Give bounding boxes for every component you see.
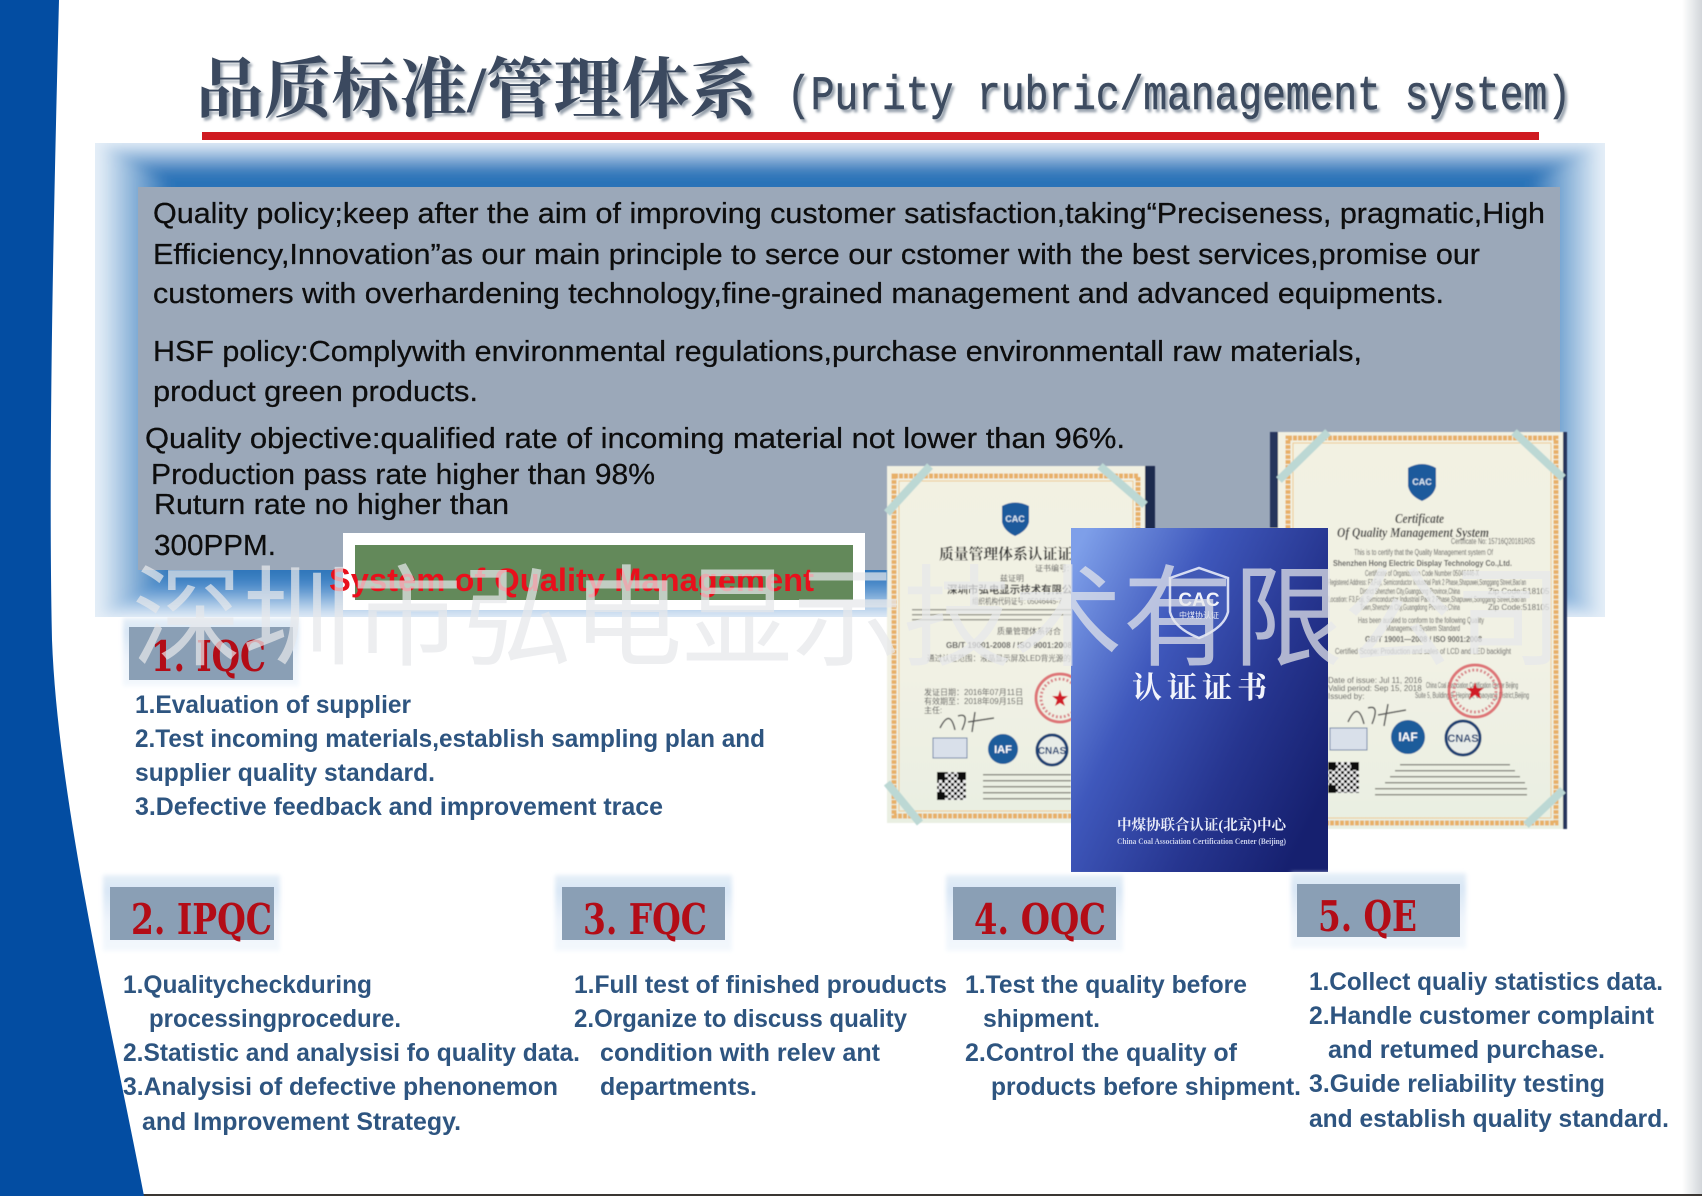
icon: accreditation logos: IAF [1398, 730, 1418, 744]
section: 4.OQC [946, 875, 1301, 1101]
banner: System of Quality Management [329, 533, 865, 610]
heading: 3.FQC [555, 875, 732, 951]
quality objective: Quality objective:qualified rate of incoming material not lower than 96%. [145, 423, 1125, 455]
icon: CAC shield: CAC [1178, 590, 1220, 611]
OQC list: 2.Control the quality of [965, 1039, 1238, 1067]
certificate: Chinese quality management: 质量管理体系符合 [997, 626, 1061, 636]
certificate: English quality management system: Issued by: [1328, 692, 1364, 701]
OQC list: 1.Test the quality before [965, 971, 1247, 999]
certificate: Chinese quality management: 有效期至：2018年09月15日 [924, 696, 1024, 706]
certificate: English quality management system: Suite 5, Building 9, Hepingli, Chaoyang District,Beijing [1415, 691, 1529, 700]
certificate: English quality management system: GB/T 19001—2008 / ISO 9001:2008 [1365, 635, 1482, 644]
certificate: Chinese quality management: 兹证明 [1000, 573, 1024, 583]
certificate: Chinese quality management: 主任: [924, 705, 942, 715]
IPQC list: 3.Analysisi of defective phenonemon [123, 1073, 558, 1101]
quality objective: Production pass rate higher than 98% [151, 459, 655, 491]
certificate: English quality management system: Certified Scope: Production and sales of LCD and LED backlight [1335, 647, 1512, 656]
certificate: English quality management system: Location: F3,Fuji, Semiconductor Industrial Park 2 Phase,Shapuwei,Songgang Street,Bao'an [1328, 595, 1526, 604]
IQC list: supplier quality standard. [135, 759, 435, 787]
banner: System of Quality Management: System of Quality Management [329, 562, 814, 598]
OQC list: products before shipment. [991, 1073, 1301, 1101]
icon: accreditation logos [1330, 720, 1480, 755]
title red underline [202, 132, 1539, 140]
quality policy: Quality policy;keep after the aim of improving customer satisfaction,taking“Preciseness, pragmatic,High [153, 198, 1545, 230]
heading: 2.IPQC [103, 875, 280, 951]
certificate: Chinese quality management [887, 466, 1155, 823]
IPQC list: 1.Qualitycheckduring [123, 971, 372, 999]
IQC list: 1.Evaluation of supplier [135, 691, 411, 719]
certificate: English quality management system: Date of issue: Jul 11, 2016 [1328, 676, 1423, 685]
heading: 3.FQC: 3. FQC [583, 895, 707, 944]
certificate: Chinese quality management: 深圳市弘电显示技术有限公司 [947, 583, 1083, 596]
QE list: 2.Handle customer complaint [1309, 1002, 1655, 1030]
certificate heading [1337, 512, 1489, 541]
icon: CAC shield: 中煤协认证 [1179, 610, 1219, 620]
quality policy [153, 198, 1545, 310]
certificate: Chinese quality management: 通过认证范围：液晶显示屏及LED背光源的 [927, 653, 1071, 663]
icon: QR code [937, 772, 966, 800]
certificate: English quality management system: Shenzhen Hong Electric Display Technology Co.,Ltd. [1333, 559, 1512, 568]
title [196, 54, 1571, 127]
policy text block [145, 198, 1545, 562]
certificate: English quality management system: Management System Standard [1386, 624, 1460, 633]
heading: 4.OQC [946, 875, 1123, 951]
watermark: company name: 深圳市弘电显示技术有限公司 [132, 558, 1563, 681]
FQC list: departments. [600, 1073, 757, 1101]
IQC list: 2.Test incoming materials,establish sampling plan and [135, 725, 765, 753]
heading: 1.IQC: 1. IQC [151, 632, 266, 681]
certificate: Chinese quality management: 证书编号: [1035, 563, 1069, 573]
icon: CAC badge [1408, 464, 1436, 501]
heading: 4.OQC: 4. OQC [974, 895, 1106, 944]
certificate: English quality management system: Has been audited to conform to the following Quality [1358, 616, 1484, 625]
icon: QR code [1328, 762, 1359, 793]
icon: accreditation logos: CNAS [1447, 733, 1479, 745]
certificate: English quality management system: District Shenzhen City,Guangdong Province,China [1360, 587, 1460, 596]
QE list: 1.Collect qualiy statistics data. [1309, 968, 1663, 996]
icon: accreditation logos: IAF [994, 744, 1012, 756]
booklet issuer [1117, 816, 1288, 846]
section: 2.IPQC [103, 875, 580, 1136]
quality policy: customers with overhardening technology,fine-grained management and advanced equipments. [153, 278, 1444, 310]
icon: accreditation logos: CNAS [1038, 746, 1066, 757]
certificate: Chinese quality management: GB/T 19001-2008 / ISO 9001:2008 [946, 641, 1073, 650]
HSF policy: HSF policy:Complywith environmental regulations,purchase environmentall raw materials, [153, 336, 1362, 368]
QE list [1309, 968, 1669, 1133]
booklet issuer: China Coal Association Certification Center (Beijing) [1117, 836, 1286, 846]
left blue sidebar curve [0, 0, 144, 1196]
icon: red seal [1036, 674, 1084, 722]
FQC list [574, 971, 947, 1101]
certificate: Chinese quality management: 发证日期：2016年07月11日 [924, 687, 1023, 697]
IQC list [135, 691, 765, 821]
FQC list: 1.Full test of finished prouducts [574, 971, 947, 999]
IPQC list: and Improvement Strategy. [142, 1108, 461, 1136]
IQC list: 3.Defective feedback and improvement trace [135, 793, 663, 821]
certificate heading: Of Quality Management System [1337, 526, 1489, 541]
panel: blue frame [95, 143, 1605, 617]
section: 5.QE [1291, 873, 1669, 1133]
title: Chinese: 品质标准/管理体系 [196, 54, 758, 127]
quality objective: 300PPM. [154, 530, 276, 562]
HSF policy [153, 336, 1362, 408]
section: 1.IQC [123, 618, 765, 821]
certificate: English quality management system: This is to certify that the Quality Management system Of [1354, 548, 1494, 557]
quality objective: Ruturn rate no higher than [154, 489, 509, 521]
icon: CAC badge [1002, 502, 1029, 536]
heading: 1.IQC [123, 618, 299, 686]
certificate: English quality management system: Registered Address: F3,Fuji, Semiconductor Industrial Park 2 Phase,Shapuwei,Songgang Street,Bao'an [1328, 578, 1526, 587]
certificate: English quality management system: Valid period: Sep 15, 2018 [1328, 684, 1422, 693]
IPQC list: processingprocedure. [149, 1005, 401, 1033]
certificate: English quality management system: Town,Shenzhen City,Guangdong Province,China [1360, 603, 1460, 612]
quality objective [145, 423, 1125, 562]
heading: 5.QE [1291, 873, 1466, 948]
certificate booklet: blue cover [1071, 528, 1328, 872]
FQC list: 2.Organize to discuss quality [574, 1005, 907, 1033]
QE list: and retumed purchase. [1328, 1036, 1605, 1064]
icon: red seal [1449, 665, 1501, 717]
booklet title: 认证证书 [1132, 672, 1268, 705]
icon: CAC badge: CAC [1005, 514, 1025, 524]
certificate: English quality management system: China Coal Association Certification Center Beijing [1426, 681, 1518, 690]
icon: accreditation logos [933, 734, 1067, 765]
certificate: English quality management system [1270, 432, 1567, 829]
IPQC list: 2.Statistic and analysisi fo quality data. [123, 1039, 580, 1067]
quality policy: Efficiency,Innovation”as our main principle to serce our cstomer with the best services,promise our [153, 239, 1480, 271]
heading: 2.IPQC: 2. IPQC [131, 895, 272, 944]
HSF policy: product green products. [153, 376, 478, 408]
certificate: English quality management system: Certificate No: 15716Q20181R0S [1451, 537, 1535, 546]
section: 3.FQC [555, 875, 947, 1101]
certificate: English quality management system: Certificate of Organization Code Number 05046446-X [1365, 569, 1479, 578]
icon: CAC badge: CAC [1412, 477, 1432, 487]
FQC list: condition with relev ant [600, 1039, 881, 1067]
certificate: English quality management system: Zip Code:518105 [1488, 587, 1550, 596]
OQC list [965, 971, 1301, 1101]
certificate heading: 质量管理体系认证证书 [939, 545, 1088, 563]
panel: grey policy background [138, 187, 1560, 570]
certificate: English quality management system: Zip Code:518105 [1488, 603, 1550, 612]
IPQC list [123, 971, 580, 1136]
QE list: 3.Guide reliability testing [1309, 1070, 1605, 1098]
certificate heading: Certificate [1395, 512, 1444, 527]
booklet issuer: 中煤协联合认证(北京)中心 [1117, 816, 1288, 834]
certificate: Chinese quality management: 组织机构代码证号: 05046445-7 [972, 596, 1062, 606]
QE list: and establish quality standard. [1309, 1105, 1669, 1133]
heading: 5.QE: 5. QE [1318, 892, 1417, 941]
OQC list: shipment. [983, 1005, 1100, 1033]
icon: CAC shield [1170, 568, 1228, 638]
